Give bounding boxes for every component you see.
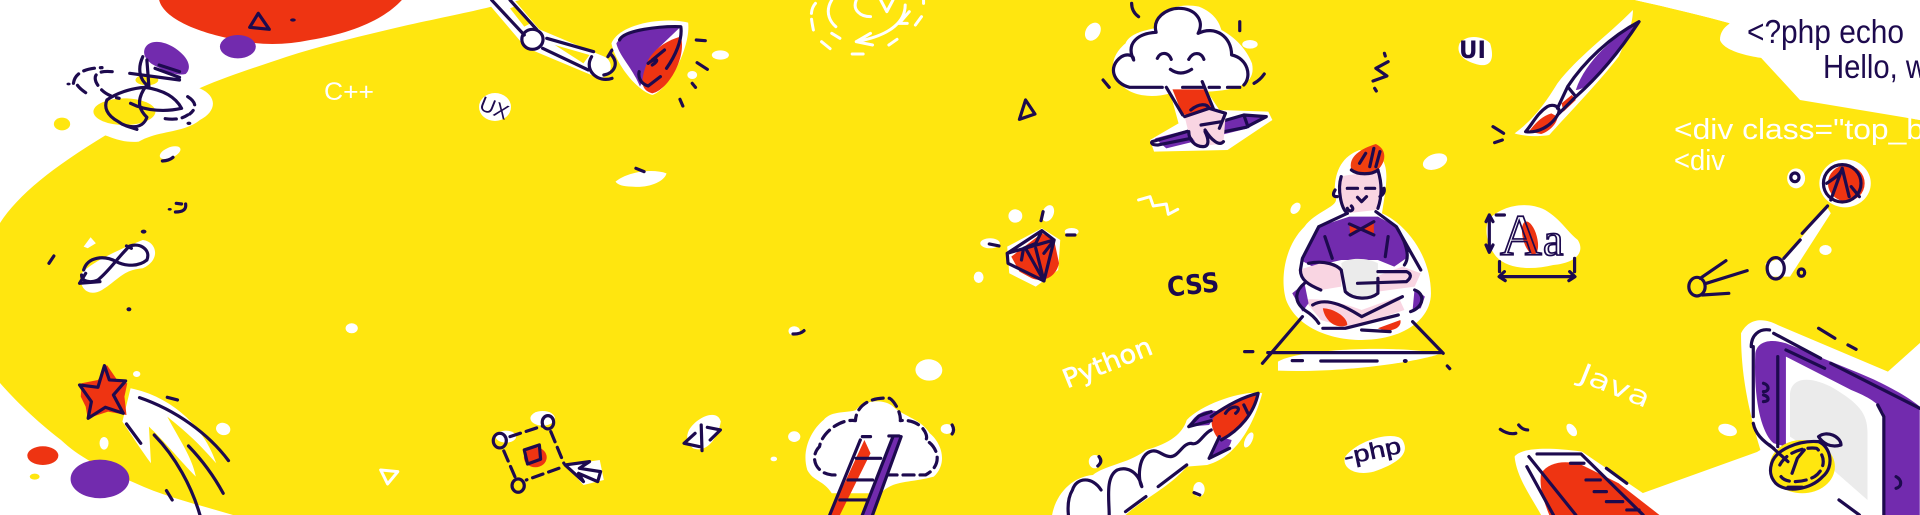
icon: rocket with smoke — [1052, 352, 1262, 515]
icon: selection box and cursor — [493, 411, 604, 492]
icon: code brackets — [684, 415, 721, 451]
icon: white zigzag — [1139, 197, 1178, 214]
icon: typography Aa: A — [1500, 203, 1542, 268]
icon: shooting star — [80, 365, 233, 515]
small dash mark — [789, 326, 804, 336]
icon: ruler — [1500, 422, 1661, 515]
icon: white refresh arrows — [811, 0, 924, 54]
text: Python: Python — [1058, 332, 1157, 395]
label: UX: UX — [476, 92, 512, 125]
top red blob with marks — [159, 0, 402, 58]
icon: paint brush — [1493, 10, 1639, 143]
text: html code: <div class="top_b — [1674, 114, 1920, 146]
text: UI: UI — [1459, 36, 1486, 64]
icon: zigzag — [1373, 53, 1388, 91]
icon: smiling cloud holding a pen — [1082, 3, 1272, 152]
icon: cloud with ladder — [771, 356, 954, 515]
text: php label: -php — [1341, 432, 1403, 470]
speech bubble: php code — [1635, 0, 1920, 120]
blobs bottom left — [27, 446, 129, 498]
text: C++: C++ — [324, 78, 374, 106]
text: CSS: CSS — [1166, 267, 1221, 304]
white dash mark — [616, 168, 667, 187]
icon: hourglass with orbits — [54, 42, 213, 142]
text: php label — [1341, 432, 1405, 473]
icon: phone with stopwatch — [1716, 320, 1920, 515]
icon: infinity loop — [80, 237, 155, 293]
icon: lamp shade — [611, 21, 729, 106]
speech bubble: php code: <?php echo — [1747, 13, 1904, 50]
icon: sputnik — [1689, 261, 1747, 296]
icon: typography Aa — [1486, 203, 1580, 281]
icon: typography Aa: a — [1543, 214, 1563, 265]
figure: man sitting cross-legged with tablet — [1262, 144, 1451, 371]
text: Java: Java — [1572, 357, 1655, 415]
icon: triangle bottom white — [381, 470, 398, 484]
icon: triangle — [1019, 100, 1035, 119]
icon: ruby diamond — [974, 204, 1079, 287]
icon: planet with satellite — [1766, 159, 1871, 279]
text: html code: <div — [1674, 145, 1725, 177]
small marks left — [49, 144, 358, 333]
text: html code — [1674, 114, 1920, 177]
icon: lamp arm — [492, 0, 615, 79]
